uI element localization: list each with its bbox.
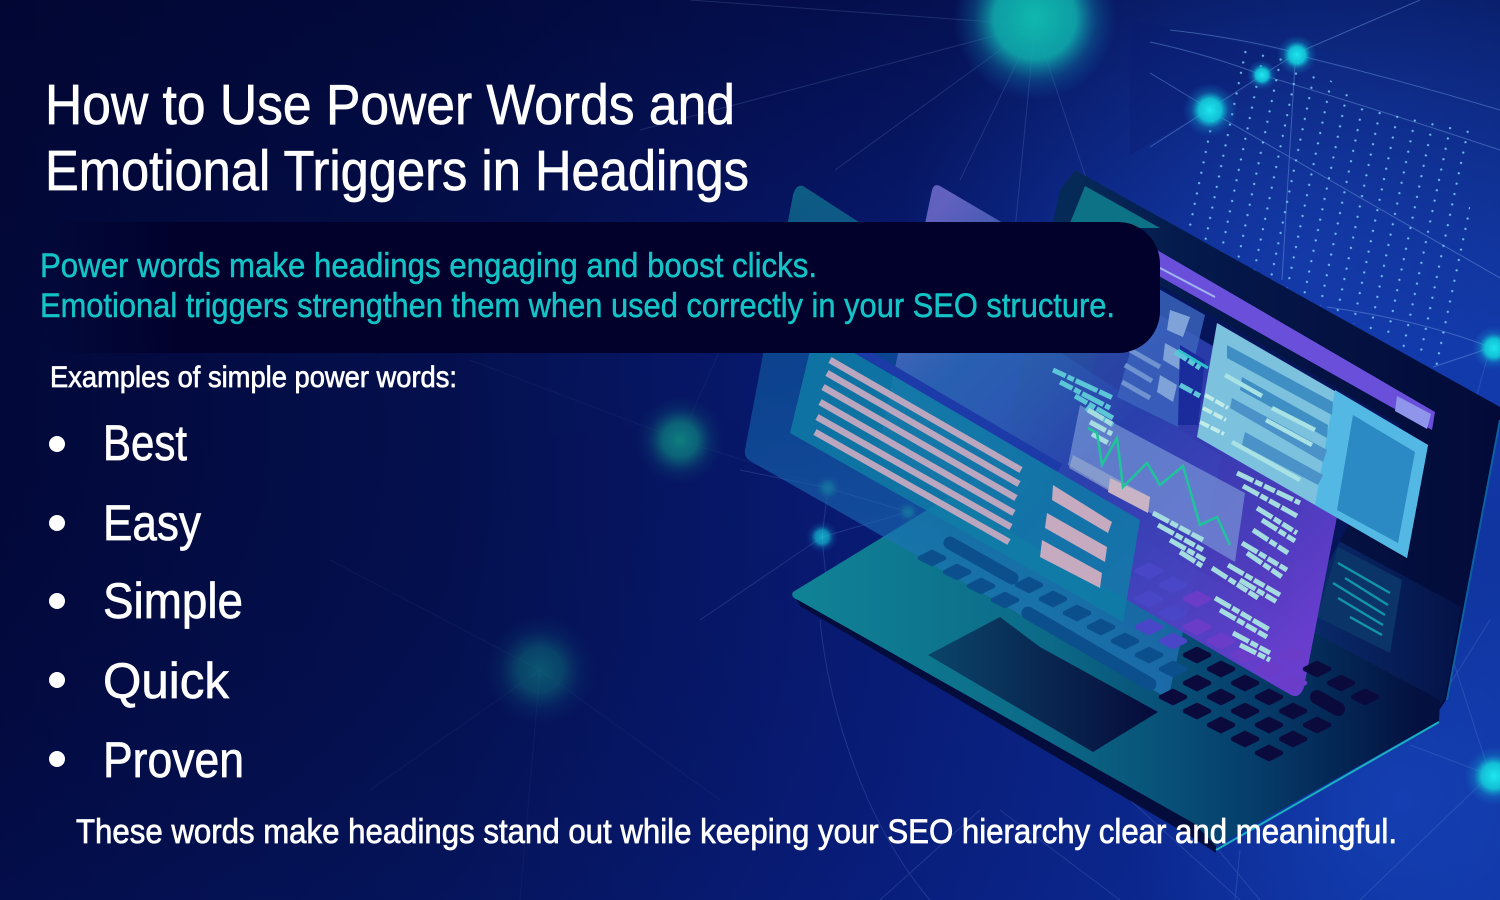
keys: under translucent panel <box>1137 565 1185 647</box>
bullet list: Simple <box>103 573 243 629</box>
intro text: Emotional triggers strengthen them when used correctly in your SEO structure. <box>40 287 1115 325</box>
intro pill <box>0 222 1160 353</box>
intro text: Power words make headings engaging and boost clicks. <box>40 247 817 285</box>
glow nodes <box>484 0 1500 806</box>
keys: purple <box>1185 593 1305 689</box>
chart panel <box>1068 405 1245 562</box>
line chart <box>1088 428 1230 545</box>
laptop <box>745 170 1500 853</box>
title: How to Use Power Words and <box>45 73 735 137</box>
panel: back window <box>745 186 1222 695</box>
bullet list: Proven <box>103 732 244 788</box>
panel: light blue window <box>1197 323 1428 558</box>
window panes grid <box>1117 284 1208 427</box>
dark band <box>850 345 1060 468</box>
code lines <box>1053 352 1300 660</box>
trackpad <box>928 617 1158 752</box>
bullet list: Easy <box>103 495 201 551</box>
laptop base <box>792 465 1440 853</box>
examples label: Examples of simple power words: <box>50 361 457 394</box>
intro text <box>40 247 1115 325</box>
title <box>45 73 749 203</box>
panel: translucent purple window <box>878 185 1354 696</box>
title: Emotional Triggers in Headings <box>45 139 749 203</box>
bullet list: Quick <box>103 653 230 709</box>
closing text: These words make headings stand out while keeping your SEO hierarchy clear and meaningful. <box>76 813 1397 851</box>
screen topbar <box>1157 250 1435 430</box>
panel: teal content block <box>790 330 1140 622</box>
bullet list <box>49 415 244 788</box>
keyboard keys <box>920 543 1377 759</box>
bullet list: Best <box>103 415 187 471</box>
keys: dark <box>1161 649 1377 759</box>
keys: teal area <box>920 543 1185 684</box>
pink boxes <box>1040 485 1112 588</box>
network lines <box>330 0 1500 900</box>
dim side panel <box>1317 547 1402 653</box>
laptop lid <box>1000 170 1500 712</box>
stripes list <box>815 360 1021 542</box>
dot grid <box>1180 50 1470 370</box>
